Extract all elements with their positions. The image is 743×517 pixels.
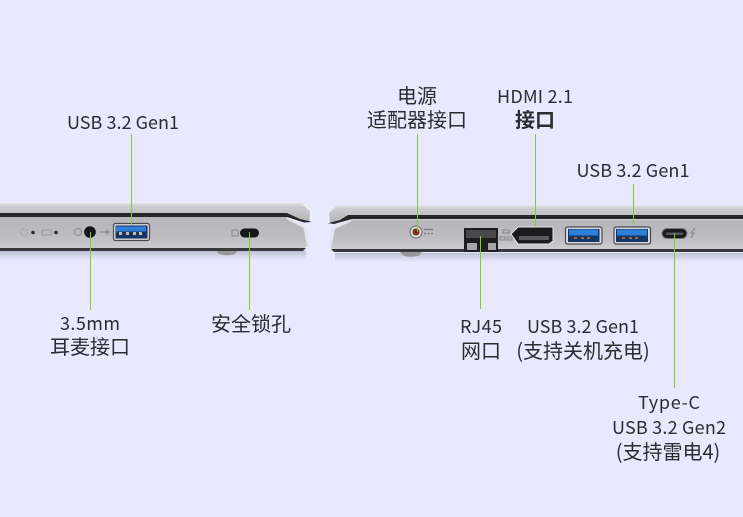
RJ45 port	[464, 228, 498, 252]
lid dark gap	[327, 214, 743, 224]
USB port	[114, 224, 150, 240]
leader lines	[90, 134, 674, 388]
label: 3.5mm headset jack: 3.5mm	[60, 310, 120, 336]
base	[329, 220, 743, 250]
3.5mm jack	[84, 226, 96, 238]
label: power adapter port: 适配器接口	[367, 104, 467, 133]
label: RJ45 network port	[460, 313, 502, 364]
status LEDs	[20, 228, 58, 236]
label: security lock: 安全锁孔	[211, 308, 291, 337]
label: USB 3.2 Gen1 right: USB 3.2 Gen1	[576, 157, 690, 183]
label: Type-C USB 3.2 Gen2: Type-C	[638, 389, 700, 415]
USB port 2	[614, 227, 650, 244]
label: Type-C USB 3.2 Gen2: (支持雷电4)	[616, 436, 720, 465]
icon: headset	[74, 228, 82, 236]
icon: usb glyph	[100, 230, 110, 234]
label: USB 3.2 Gen1 power-off charging: (支持关机充电)	[516, 335, 650, 364]
label: USB 3.2 Gen1 left: USB 3.2 Gen1	[67, 109, 179, 135]
USB port 1	[566, 227, 602, 244]
label: 3.5mm headset jack	[50, 310, 130, 360]
label: USB 3.2 Gen1 power-off charging	[516, 313, 650, 364]
HDMI port	[511, 227, 553, 244]
label: Type-C USB 3.2 Gen2: USB 3.2 Gen2	[612, 414, 726, 440]
left laptop side view	[0, 203, 313, 260]
right laptop side view	[326, 206, 743, 262]
icon: thunderbolt glyph	[691, 228, 695, 238]
label: power adapter port	[367, 80, 467, 133]
icon: network glyph	[500, 230, 512, 240]
base	[0, 217, 309, 249]
lid	[0, 203, 313, 222]
label: USB 3.2 Gen1 power-off charging: USB 3.2 Gen1	[527, 313, 639, 339]
label: HDMI 2.1 port	[497, 83, 573, 133]
label: HDMI 2.1 port: 接口	[515, 104, 555, 133]
label: 3.5mm headset jack: 耳麦接口	[50, 331, 130, 360]
icon: lock glyph	[232, 230, 238, 236]
power port	[410, 226, 433, 238]
label: power adapter port: 电源	[397, 80, 437, 109]
label: RJ45 network port: RJ45	[460, 313, 502, 339]
lid	[326, 206, 743, 224]
label: RJ45 network port: 网口	[461, 335, 501, 364]
lid dark gap	[0, 212, 312, 222]
Type-C port	[662, 228, 687, 238]
label: HDMI 2.1 port: HDMI 2.1	[497, 83, 573, 109]
security lock slot	[240, 228, 259, 238]
label: Type-C USB 3.2 Gen2	[612, 389, 726, 465]
